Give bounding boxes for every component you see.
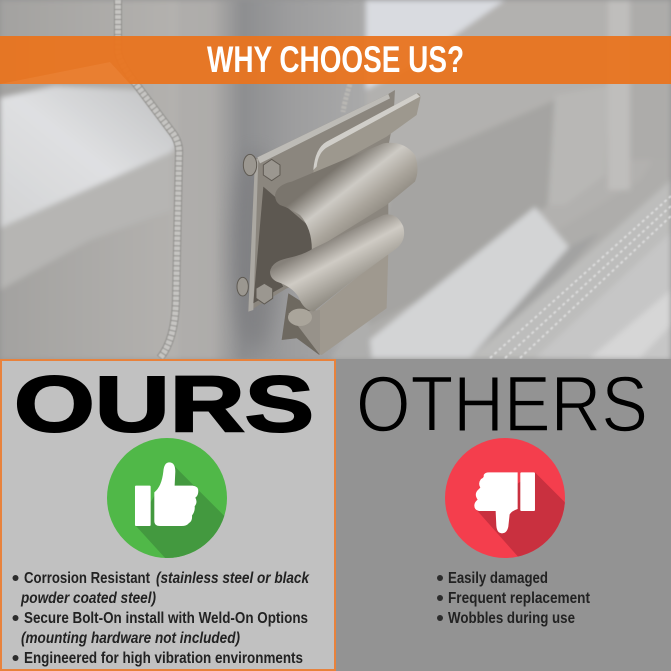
upper flange (313, 93, 420, 175)
panel: others (336, 359, 671, 626)
list: ours benefits (12, 570, 310, 667)
banner highlight (0, 62, 130, 84)
list: ours benefits: (stainless steel or black (156, 570, 310, 587)
list: ours benefits: Engineered for high vibration environments (24, 650, 303, 667)
bracket shadow on wall (231, 150, 279, 350)
list: ours benefits: powder coated steel) (20, 590, 156, 607)
heading: ours: OURS (14, 359, 314, 448)
list: others drawbacks (437, 570, 591, 627)
list: ours benefits: Secure Bolt-On install with Weld-On Options (24, 610, 308, 627)
bolts and nuts (237, 154, 280, 304)
list: others drawbacks: Wobbles during use (448, 610, 575, 627)
list: ours benefits: (mounting hardware not included) (21, 630, 240, 647)
hinge pin (288, 309, 312, 326)
lower tab plate (317, 252, 388, 355)
list: others drawbacks: Frequent replacement (448, 590, 591, 607)
orange title banner (0, 36, 671, 84)
folded hinge (282, 293, 320, 355)
icon: thumbs up (107, 438, 227, 558)
upper curved clip (275, 143, 417, 255)
icon: thumbs down (445, 438, 565, 558)
panel: ours (1, 359, 335, 670)
list: ours benefits: Corrosion Resistant (24, 570, 151, 587)
lower curved clip (270, 214, 404, 312)
list: others drawbacks: Easily damaged (448, 570, 548, 587)
ribbed rail detail (490, 196, 671, 358)
stainless steel bracket (237, 90, 420, 355)
back plate (248, 90, 395, 312)
weld seam (118, 0, 350, 358)
title: WHY CHOOSE US? (207, 39, 464, 80)
background photo of stainless steel mud flap bracket on truck body (0, 0, 671, 360)
